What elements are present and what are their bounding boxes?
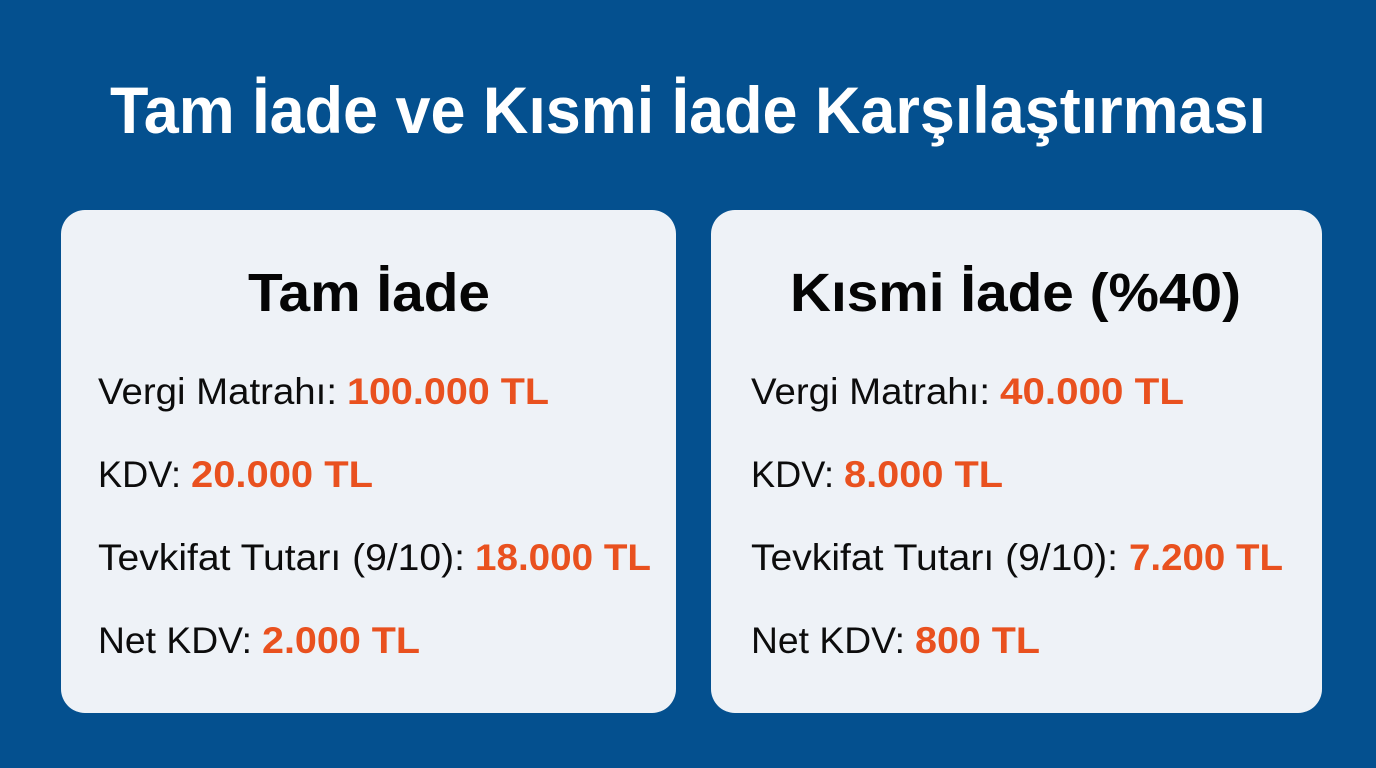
panel heading: Tam İade: Tam İade xyxy=(248,263,490,323)
title: Tam İade ve Kısmi İade Karşılaştırması xyxy=(110,73,1266,147)
row: Net KDV xyxy=(98,620,420,661)
panel: Tam İade xyxy=(61,210,676,713)
row: KDV xyxy=(751,454,1003,495)
row: Tevkifat Tutarı: 18.000 TL xyxy=(475,537,651,578)
panel: Kısmi İade xyxy=(711,210,1322,713)
row: Tevkifat Tutarı xyxy=(98,537,651,578)
row: KDV: KDV: xyxy=(751,454,834,495)
row: Tevkifat Tutarı: 7.200 TL xyxy=(1129,537,1283,578)
row: Vergi Matrahı: 40.000 TL xyxy=(1000,371,1184,412)
row: Net KDV: 2.000 TL xyxy=(262,620,420,661)
row: Tevkifat Tutarı xyxy=(751,537,1283,578)
row: Vergi Matrahı: Vergi Matrahı: xyxy=(98,371,337,412)
row: Vergi Matrahı: 100.000 TL xyxy=(347,371,549,412)
row: Tevkifat Tutarı: Tevkifat Tutarı (9/10): xyxy=(751,537,1118,578)
row: Tevkifat Tutarı: Tevkifat Tutarı (9/10): xyxy=(98,537,465,578)
row: Vergi Matrahı xyxy=(98,371,549,412)
row: KDV: 20.000 TL xyxy=(191,454,373,495)
row: Net KDV: 800 TL xyxy=(915,620,1040,661)
panel heading: Kısmi İade (%40): Kısmi İade (%40) xyxy=(790,263,1241,323)
row: Net KDV: Net KDV: xyxy=(751,620,905,661)
row: KDV: 8.000 TL xyxy=(844,454,1003,495)
row: Net KDV: Net KDV: xyxy=(98,620,252,661)
row: Vergi Matrahı xyxy=(751,371,1184,412)
row: KDV: KDV: xyxy=(98,454,181,495)
row: Net KDV xyxy=(751,620,1040,661)
row: KDV xyxy=(98,454,373,495)
row: Vergi Matrahı: Vergi Matrahı: xyxy=(751,371,990,412)
